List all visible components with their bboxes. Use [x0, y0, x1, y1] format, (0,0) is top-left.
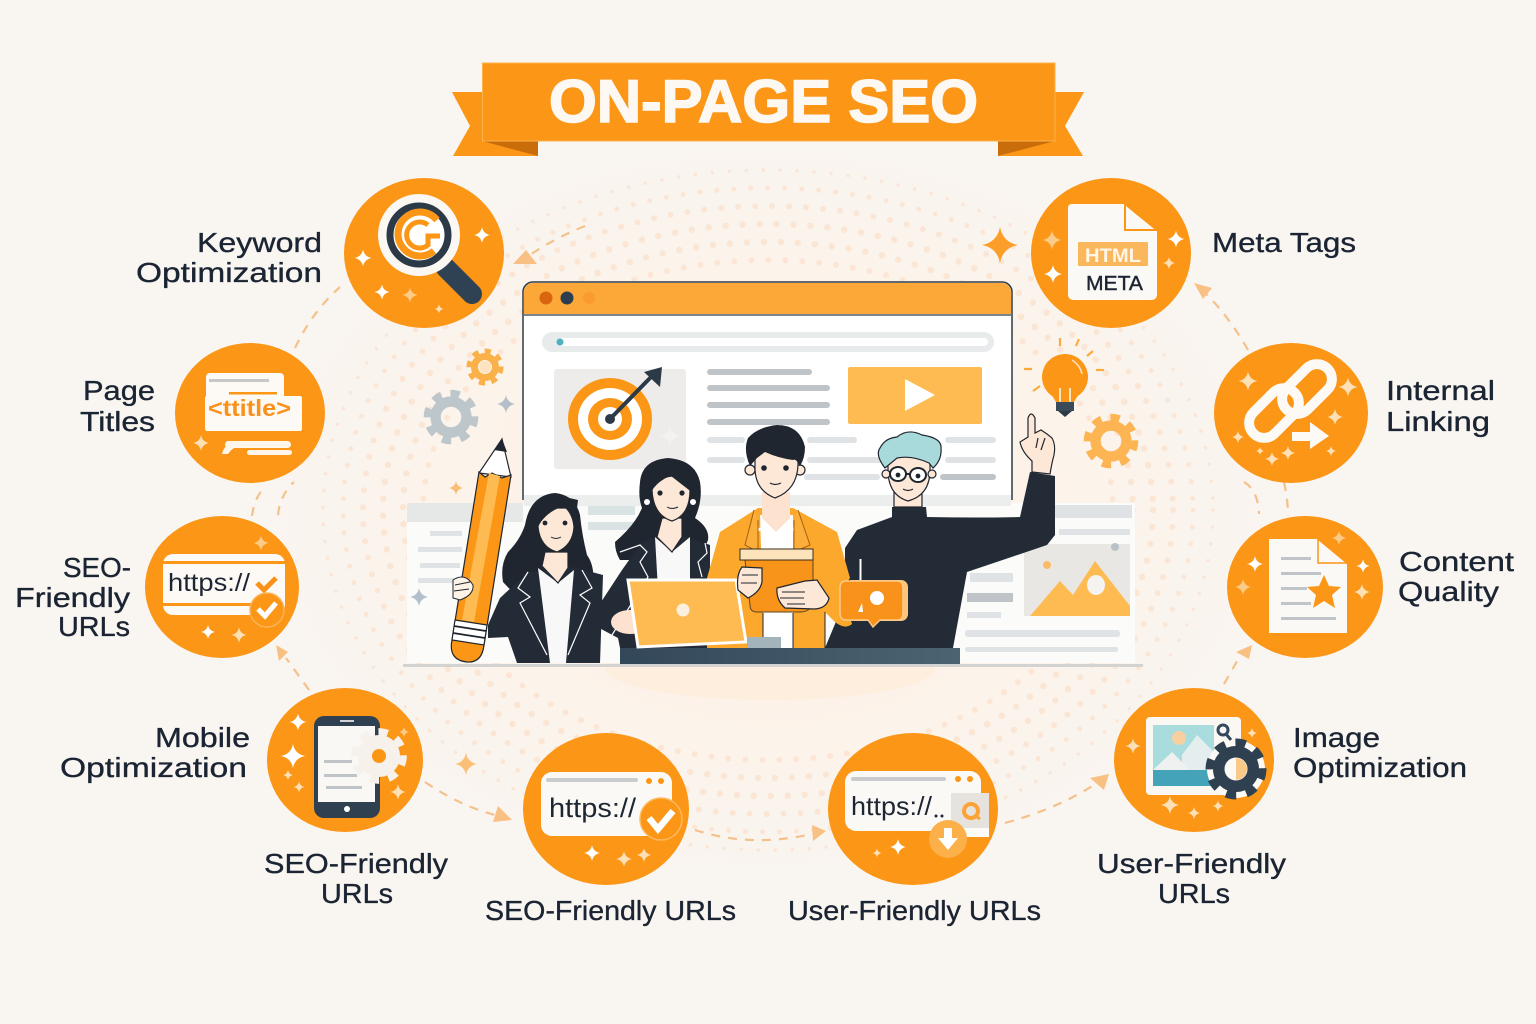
process arrows [252, 226, 1288, 841]
label: SEO-Friendly URLs lower left: SEO-Friendly [264, 848, 448, 879]
label: Friendly [15, 582, 130, 613]
panel: Keyword Optimization [136, 178, 504, 328]
label: SEO-Friendly URLs [485, 895, 736, 926]
text lines [707, 369, 996, 480]
label: Optimization [60, 752, 247, 783]
label: User-Friendly URLs lower right: URLs [1158, 878, 1230, 909]
label: Meta Tags [1212, 227, 1356, 258]
person: woman with laptop [588, 458, 710, 648]
label: Quality [1398, 576, 1499, 607]
image placeholder [1024, 543, 1130, 616]
icon: title tag: <ttitle> [208, 395, 291, 421]
icon: pencil [451, 439, 511, 662]
label: SEO-Friendly URLs lower left: URLs [321, 878, 393, 909]
title text: ON-PAGE SEO [549, 68, 978, 135]
panel: Image Optimization [1114, 688, 1467, 832]
label [60, 722, 250, 783]
icon: url card: https:// [168, 569, 250, 597]
video panel [848, 367, 982, 424]
icon: image with gear [1146, 717, 1265, 798]
icon: url check: https:// [549, 793, 637, 823]
icon: document with star [1269, 539, 1347, 633]
icon: phone with gear [314, 716, 402, 818]
ground line [403, 664, 1143, 667]
panel: Page Titles [80, 343, 325, 483]
icon: url card [163, 554, 285, 627]
label: URLs [58, 611, 130, 642]
label: SEO- [63, 552, 131, 583]
title banner [452, 63, 1084, 156]
label: Mobile [155, 722, 250, 753]
browser window [523, 282, 1012, 506]
panel: Content Quality [1227, 516, 1514, 658]
tablet [738, 549, 829, 612]
person: man with tablet [628, 425, 852, 648]
label: SEO-Friendly URLs lower left [264, 848, 448, 909]
speech bubble [840, 559, 908, 627]
panel: SEO-Friendly URLs bottom [485, 733, 736, 926]
label: User-Friendly URLs [788, 895, 1041, 926]
panel: Mobile Optimization [60, 688, 423, 832]
panel: Internal Linking [1214, 343, 1495, 483]
label [80, 375, 155, 437]
person: man pointing up [825, 414, 1055, 648]
label: Optimization [1293, 752, 1467, 783]
icon: title tag [205, 373, 302, 455]
decorative gears and sparkles [410, 227, 1134, 775]
label [15, 552, 131, 642]
icon: url check [541, 772, 682, 840]
label: Internal [1386, 375, 1495, 406]
label: Page [83, 375, 155, 406]
label: Content [1399, 546, 1514, 577]
label: Linking [1386, 406, 1490, 437]
icon: url download: https:// [851, 791, 933, 821]
address bar [542, 332, 994, 352]
label [1293, 722, 1467, 783]
icon: HTML meta file: META [1086, 273, 1144, 295]
icon: right gear [1088, 418, 1134, 464]
label: User-Friendly URLs lower right [1097, 848, 1286, 909]
hand [1020, 414, 1055, 474]
icon: grey gear [428, 394, 474, 440]
target panel [554, 367, 686, 469]
label [136, 227, 322, 288]
icon: chain link [1243, 358, 1338, 444]
label [1386, 375, 1495, 437]
lower background page [407, 503, 1135, 663]
person: woman with pencil [453, 493, 603, 663]
icon: light bulb [1024, 338, 1104, 417]
icon: magnifier [378, 194, 472, 294]
panel: SEO-Friendly URLs left [15, 516, 299, 658]
label [1398, 546, 1514, 607]
label: Image [1293, 722, 1380, 753]
central illustration [403, 227, 1143, 775]
icon: HTML meta file [1068, 204, 1157, 300]
icon: orange gear [470, 352, 500, 382]
laptop [628, 580, 781, 648]
icon: arrow [1292, 422, 1329, 449]
label: Optimization [136, 257, 322, 288]
desk [620, 648, 960, 664]
label: Titles [80, 406, 155, 437]
label: Keyword [197, 227, 322, 258]
icon: HTML meta file: HTML [1085, 246, 1141, 267]
panel: User-Friendly URLs bottom [788, 733, 1041, 926]
label: User-Friendly URLs lower right: User-Friendly [1097, 848, 1286, 879]
panel: Meta Tags [1031, 178, 1356, 328]
icon: url download [845, 771, 989, 858]
